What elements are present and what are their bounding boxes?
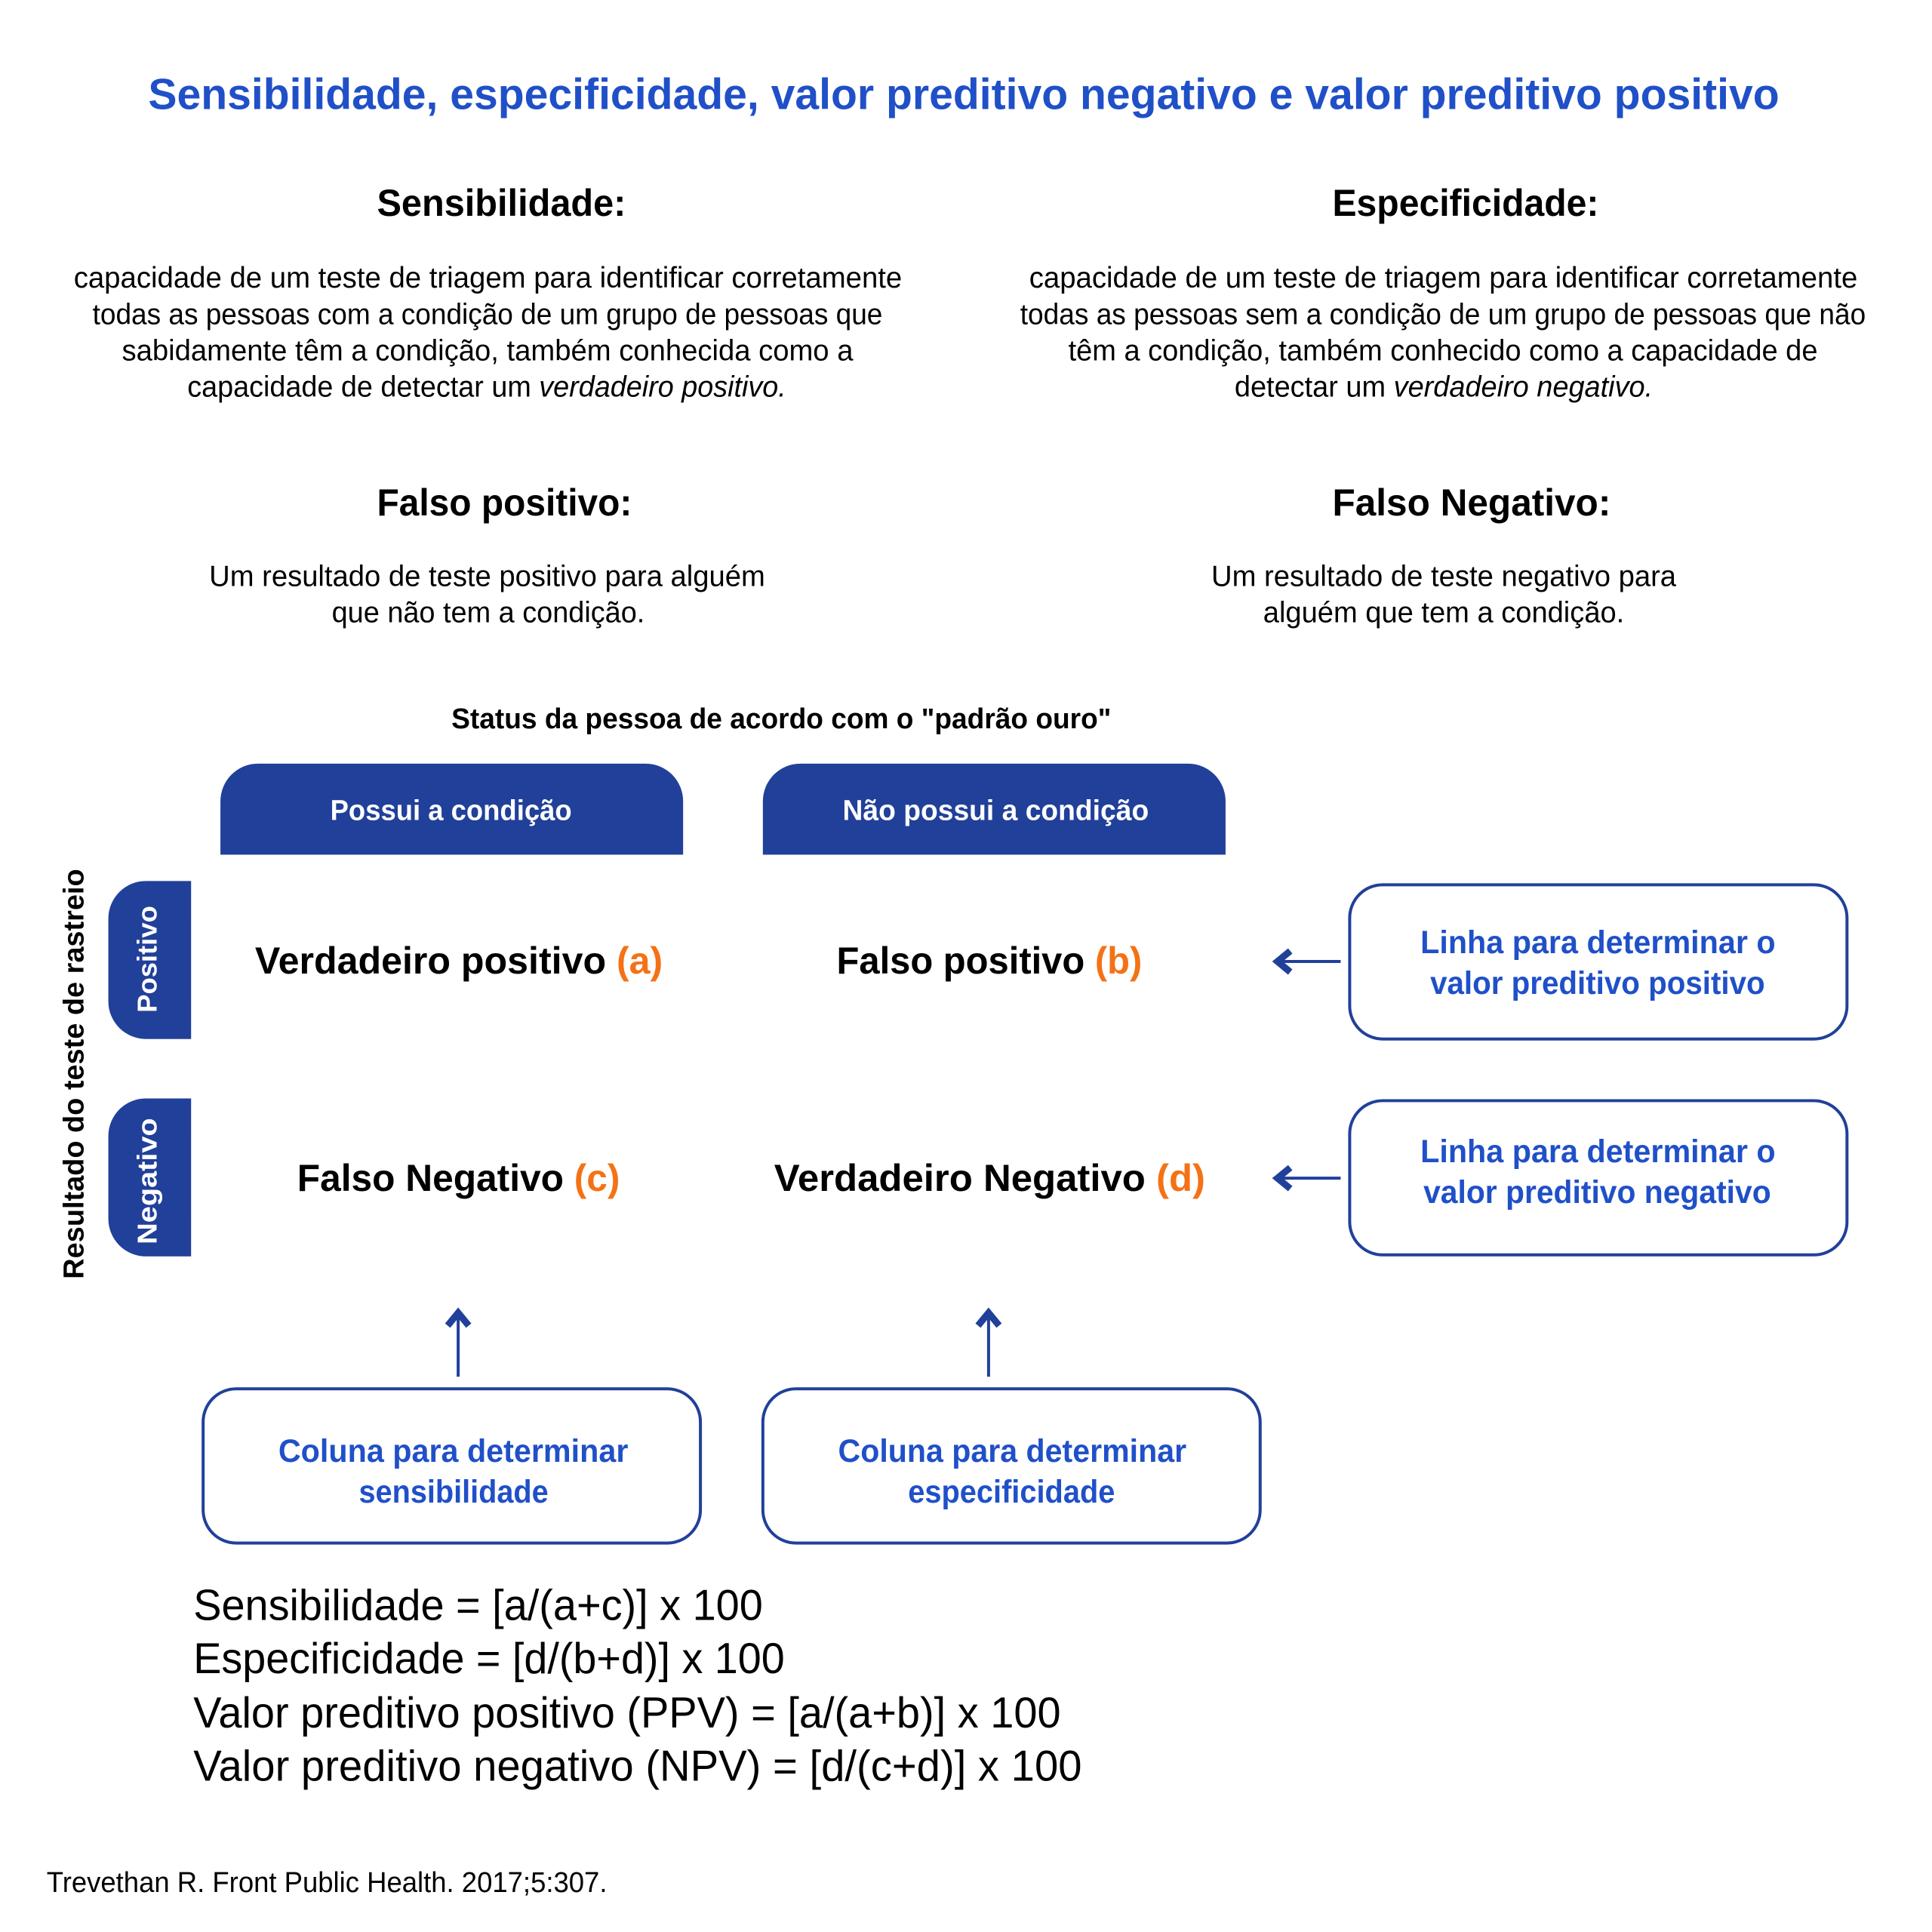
callout: coluna sensibilidade: [203, 1389, 700, 1543]
text block: especificidade: têm a condição, também conhecido como a capacidade de: [1069, 335, 1817, 368]
title: Sensibilidade, especificidade, valor preditivo negativo e valor preditivo positivo: [148, 71, 1780, 119]
cell: falso negativo: Falso Negativo (c): [297, 1157, 620, 1199]
arrow: up to sensibilidade column: [448, 1313, 469, 1377]
formulas: [193, 1581, 1082, 1791]
callout: linha valor preditivo negativo: valor preditivo negativo: [1423, 1174, 1771, 1211]
axis label: resultado do teste de rastreio: Resultado do teste de rastreio: [59, 869, 91, 1279]
text block: falso negativo: alguém que tem a condição.: [1263, 596, 1624, 629]
heading: falso positivo: Falso positivo:: [377, 481, 632, 524]
text block: falso negativo: [1211, 561, 1676, 629]
text block: sensibilidade: capacidade de um teste de triagem para identificar corretamente: [74, 262, 902, 294]
text block: especificidade: detectar um verdadeiro negativo.: [1235, 371, 1653, 403]
heading: falso negativo: Falso Negativo:: [1332, 481, 1611, 524]
callout: coluna especificidade: [763, 1389, 1260, 1543]
panel: falso negativo definition: [1211, 481, 1676, 629]
column header: não possui a condição: [763, 764, 1226, 854]
formulas: Valor preditivo positivo (PPV) = [a/(a+b)] x 100: [193, 1689, 1061, 1737]
callout: coluna sensibilidade: sensibilidade: [359, 1474, 549, 1510]
arrow: to positive row: [1278, 951, 1340, 972]
callout: linha valor preditivo negativo: [1349, 1100, 1847, 1255]
panel: falso positivo definition: [209, 481, 765, 629]
panel: especificidade definition: [1020, 182, 1866, 403]
callout: linha valor preditivo negativo: Linha para determinar o: [1420, 1134, 1776, 1170]
text block: sensibilidade: [74, 262, 902, 403]
arrow: to negative row: [1278, 1168, 1340, 1189]
heading: especificidade: Especificidade:: [1332, 182, 1598, 224]
cell: falso positivo: Falso positivo (b): [837, 940, 1142, 982]
text block: especificidade: [1020, 262, 1866, 403]
heading: sensibilidade: Sensibilidade:: [377, 182, 626, 224]
column header: possui a condição: Possui a condição: [331, 795, 572, 827]
callout: linha valor preditivo positivo: valor preditivo positivo: [1430, 965, 1765, 1001]
text block: sensibilidade: capacidade de detectar um verdadeiro positivo.: [187, 371, 786, 403]
source citation: Trevethan R. Front Public Health. 2017;5:307.: [47, 1867, 607, 1899]
column header: possui a condição: [220, 764, 683, 854]
arrow: up to especificidade column: [978, 1313, 999, 1377]
cell: verdadeiro positivo: Verdadeiro positivo (a): [255, 940, 663, 982]
formulas: Especificidade = [d/(b+d)] x 100: [193, 1635, 785, 1683]
column header: não possui a condição: Não possui a condição: [843, 795, 1149, 827]
row header: positivo: [109, 881, 191, 1039]
row header: negativo: Negativo: [132, 1118, 162, 1244]
callout: coluna especificidade: especificidade: [908, 1474, 1115, 1510]
cell: verdadeiro negativo: Verdadeiro Negativo (d): [774, 1157, 1205, 1199]
panel: sensibilidade definition: [74, 182, 902, 403]
callout: linha valor preditivo positivo: [1349, 884, 1847, 1039]
row header: negativo: [109, 1098, 191, 1257]
text block: falso positivo: [209, 561, 765, 629]
row header: positivo: Positivo: [132, 906, 162, 1013]
text block: sensibilidade: sabidamente têm a condição, também conhecida como a: [122, 335, 854, 368]
text block: falso negativo: Um resultado de teste negativo para: [1211, 561, 1676, 593]
text block: falso positivo: que não tem a condição.: [332, 596, 645, 629]
callout: coluna sensibilidade: Coluna para determinar: [278, 1433, 629, 1469]
text block: especificidade: todas as pessoas sem a condição de um grupo de pessoas que não: [1020, 299, 1866, 331]
callout: coluna especificidade: Coluna para determinar: [838, 1433, 1186, 1469]
table heading: status: Status da pessoa de acordo com o "padrão ouro": [451, 703, 1111, 735]
text block: especificidade: capacidade de um teste de triagem para identificar corretamente: [1029, 262, 1857, 294]
callout: linha valor preditivo positivo: Linha para determinar o: [1420, 924, 1776, 961]
text block: falso positivo: Um resultado de teste positivo para alguém: [209, 561, 765, 593]
formulas: Valor preditivo negativo (NPV) = [d/(c+d)] x 100: [193, 1743, 1082, 1791]
text block: sensibilidade: todas as pessoas com a condição de um grupo de pessoas que: [93, 299, 882, 331]
formulas: Sensibilidade = [a/(a+c)] x 100: [193, 1581, 763, 1629]
